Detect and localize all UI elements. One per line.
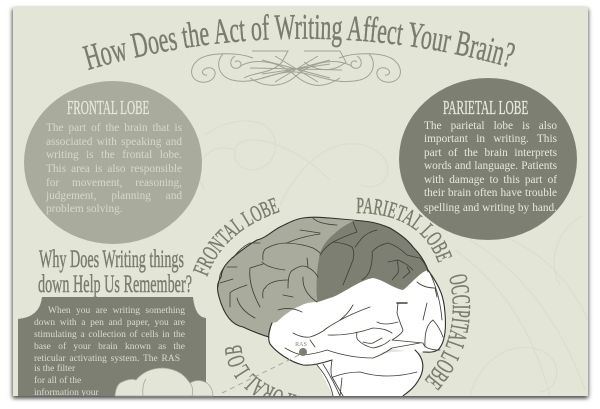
panel body text: for all of the: [34, 376, 81, 386]
parietal lobe text: words and language. Patients: [424, 160, 557, 172]
panel body text: reticular activating system. The RAS: [34, 354, 180, 364]
frontal lobe text: associated with speaking and: [46, 136, 182, 148]
parietal lobe text: part of the brain interprets: [424, 147, 557, 159]
panel: parietal lobe: [399, 78, 577, 240]
heading: why does writing help: down Help Us Remember?: [38, 271, 192, 298]
panel body text: base of your brain known as the: [34, 342, 185, 352]
frontal lobe region: [218, 217, 353, 337]
parietal lobe text: spelling and writing by hand.: [424, 202, 557, 214]
title ornament: [192, 51, 400, 85]
parietal lobe text: their brain often have trouble: [424, 187, 557, 199]
frontal lobe text: The part of the brain that is: [46, 122, 182, 134]
frontal lobe text: problem solving.: [46, 203, 123, 215]
frontal lobe heading: FRONTAL LOBE: [67, 97, 149, 119]
brainstem and cerebellum: [317, 350, 422, 396]
flower base of brain illustration: [115, 368, 213, 396]
panel body text: stimulating a collection of cells in the: [34, 330, 185, 340]
parietal lobe text: important in writing. This: [424, 133, 557, 145]
lobe label: occipital: OCCIPITAL LOBE: [424, 274, 470, 390]
parietal lobe region: [316, 221, 428, 302]
RAS marker: RAS: [295, 342, 307, 348]
title: How Does the Act of Writing Affect Your Brain?: [82, 14, 515, 70]
panel shape with notched corners: [18, 297, 206, 396]
frontal sulci: [287, 218, 337, 243]
background flourish: [199, 121, 588, 396]
frontal lobe text: This area is also responsible: [46, 163, 182, 175]
panel: why writing helps: [18, 297, 206, 396]
RAS marker: [222, 342, 307, 393]
panel body text: down with a pen and paper, you are: [34, 318, 185, 328]
parietal lobe text: with damage to this part of: [424, 174, 557, 186]
brain outline: [218, 217, 445, 396]
lower brain sulci: [293, 307, 370, 337]
white lower brain: [269, 270, 445, 365]
parietal lobe text: [424, 120, 557, 214]
heading: why does writing help: Why Does Writing things: [39, 246, 184, 273]
cerebellum folds: [331, 360, 417, 396]
parietal sulci: [320, 222, 357, 285]
panel: frontal lobe: [24, 81, 202, 244]
parietal lobe heading: PARIETAL LOBE: [443, 97, 528, 119]
frontal lobe text: [46, 122, 182, 215]
lobe label: parietal: PARIETAL LOBE: [356, 198, 452, 263]
heading: why does writing help: [38, 246, 192, 298]
parietal lobe text: The parietal lobe is also: [424, 120, 557, 132]
brain illustration: [218, 217, 445, 396]
frontal lobe text: judgement, planning and: [46, 190, 182, 202]
panel body text: is the filter: [34, 364, 75, 374]
frontal lobe text: for movement, reasoning,: [46, 177, 182, 189]
lobe label: frontal: FRONTAL LOBE: [192, 198, 280, 277]
panel body text: When you are writing something: [48, 306, 185, 316]
panel body text: [34, 306, 185, 396]
frontal lobe text: writing is the frontal lobe.: [46, 149, 182, 161]
